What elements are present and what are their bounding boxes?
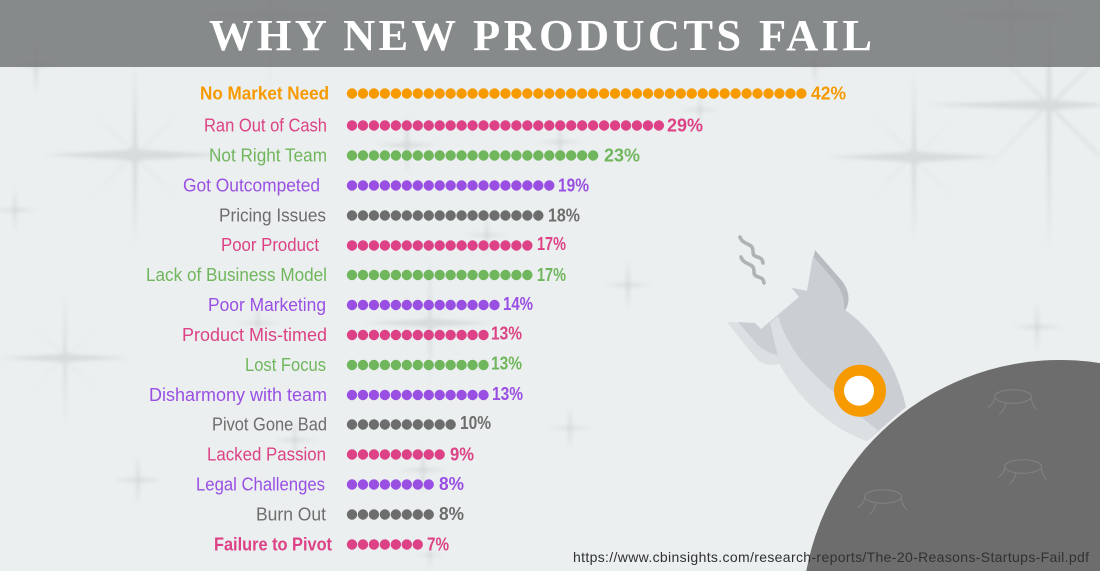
row: Not Right Team: 23% [604, 146, 640, 166]
row: Lacked Passion: Lacked Passion [207, 444, 326, 464]
row: Poor Marketing [208, 294, 533, 315]
crater 3 [858, 490, 907, 514]
crater 2 [998, 460, 1047, 484]
row: Pivot Gone Bad [212, 413, 491, 434]
row: Pivot Gone Bad: 10% [460, 413, 491, 433]
row: Disharmony with team: Disharmony with team [149, 385, 327, 405]
rocket smoke [740, 237, 764, 283]
row: Lacked Passion: 9% [450, 444, 474, 464]
row: Failure to Pivot: 7% [427, 534, 449, 554]
row: Legal Challenges: 8% [439, 474, 464, 494]
row: Lost Focus: 13% [491, 354, 522, 374]
row: Burn Out [256, 504, 464, 524]
row: Product Mis-timed: 13% [491, 324, 522, 344]
row: Pricing Issues [219, 206, 580, 226]
rocket window [834, 365, 886, 417]
row: Pricing Issues: Pricing Issues [219, 206, 326, 226]
illustration: falling rocket [727, 237, 906, 441]
header band [0, 0, 1100, 67]
crater 1 [988, 390, 1037, 414]
row: Got Outcompeted [183, 176, 589, 196]
row: Lacked Passion [207, 444, 474, 464]
row: Legal Challenges: Legal Challenges [196, 474, 325, 494]
row: Pivot Gone Bad: Pivot Gone Bad [212, 414, 327, 434]
row: Product Mis-timed: Product Mis-timed [182, 325, 327, 345]
chart: failure reasons [146, 84, 846, 554]
row: Poor Marketing: Poor Marketing [208, 295, 326, 315]
rocket right fin [792, 250, 849, 311]
row: Failure to Pivot [214, 534, 449, 554]
row: Lack of Business Model: 17% [537, 265, 566, 285]
row: Product Mis-timed [182, 324, 522, 345]
row: Lost Focus [245, 354, 522, 375]
row: No Market Need: No Market Need [200, 84, 329, 104]
row: Got Outcompeted: 19% [558, 176, 589, 196]
source url: https://www.cbinsights.com/research-reports/The-20-Reasons-Startups-Fail.pdf [573, 549, 1089, 565]
row: Burn Out: 8% [439, 504, 464, 524]
row: Ran Out of Cash: 29% [667, 116, 703, 136]
row: Not Right Team: Not Right Team [209, 146, 327, 166]
row: Got Outcompeted: Got Outcompeted [183, 176, 320, 196]
row: Failure to Pivot: Failure to Pivot [214, 534, 332, 554]
row: Pricing Issues: 18% [548, 206, 580, 226]
row: Poor Product: Poor Product [221, 235, 319, 255]
rocket body [761, 297, 906, 441]
row: Disharmony with team [149, 384, 523, 405]
row: No Market Need: 42% [811, 84, 846, 104]
row: Lack of Business Model [146, 265, 566, 285]
row: Burn Out: Burn Out [256, 504, 326, 524]
row: No Market Need [200, 84, 846, 104]
row: Legal Challenges [196, 474, 464, 494]
row: Ran Out of Cash: Ran Out of Cash [204, 116, 327, 136]
title: WHY NEW PRODUCTS FAIL [209, 10, 872, 60]
row: Lack of Business Model: Lack of Business Model [146, 265, 327, 285]
rocket left fin [727, 322, 780, 365]
row: Poor Product [221, 234, 566, 255]
row: Poor Product: 17% [537, 234, 566, 254]
row: Not Right Team [209, 146, 640, 166]
row: Poor Marketing: 14% [503, 294, 533, 314]
row: Disharmony with team: 13% [492, 384, 523, 404]
row: Ran Out of Cash [204, 116, 703, 136]
row: Lost Focus: Lost Focus [245, 355, 326, 375]
planet [806, 360, 1100, 571]
rocket body highlight [770, 316, 878, 441]
